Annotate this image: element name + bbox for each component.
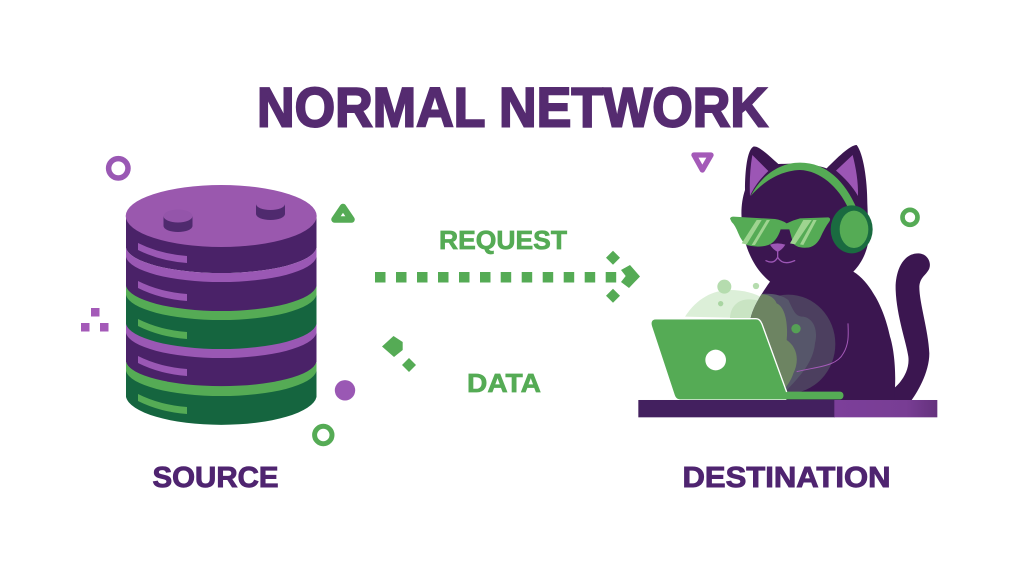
cat mouth <box>766 252 795 263</box>
drive slot 5 <box>138 394 187 414</box>
label: data: DATA <box>467 368 541 398</box>
top surface <box>126 185 317 247</box>
decoration: green ring <box>315 426 332 444</box>
table <box>638 400 937 417</box>
database icon: source <box>126 185 317 425</box>
label: request: REQUEST <box>439 225 567 255</box>
drive slot 2 <box>138 281 187 301</box>
sunglasses <box>730 217 830 248</box>
cat with laptop: destination <box>638 145 937 417</box>
decoration: purple dot <box>335 380 355 400</box>
label: source: SOURCE <box>152 462 278 494</box>
knob right <box>256 198 285 220</box>
arrow: data fragments <box>382 336 416 372</box>
layer: top purple <box>126 216 316 273</box>
band: green 2 <box>126 286 316 320</box>
decoration: green ring <box>902 210 917 225</box>
laptop <box>652 319 843 399</box>
decoration: purple squares <box>81 308 108 332</box>
layer: upper purple <box>126 253 316 312</box>
cat tail <box>863 253 930 400</box>
band: purple 3 <box>126 324 316 358</box>
headphone band <box>751 163 857 208</box>
headphone cup <box>831 205 873 253</box>
layer: lower purple <box>126 329 316 387</box>
inner ears <box>750 155 858 196</box>
arrow: request dotted <box>375 251 640 303</box>
glow above laptop <box>685 280 763 318</box>
band: green 4 <box>126 362 316 396</box>
drive slot 3 <box>138 319 187 339</box>
translucent glow on cat <box>750 294 836 392</box>
layer: bottom green <box>126 366 316 425</box>
cat head and body <box>741 145 895 400</box>
decoration: purple ring <box>109 159 128 178</box>
decoration: purple triangle <box>694 155 711 170</box>
cat nose <box>770 243 785 252</box>
title: NORMAL NETWORK <box>257 76 768 138</box>
label: destination: DESTINATION <box>682 462 890 494</box>
decoration: green triangle <box>334 207 352 220</box>
band: purple 1 <box>126 248 316 282</box>
knob left <box>164 210 192 232</box>
layer: middle green <box>126 291 316 350</box>
drive slot 4 <box>138 356 187 376</box>
laptop cable <box>797 323 848 372</box>
drive slot 1 <box>138 243 187 263</box>
